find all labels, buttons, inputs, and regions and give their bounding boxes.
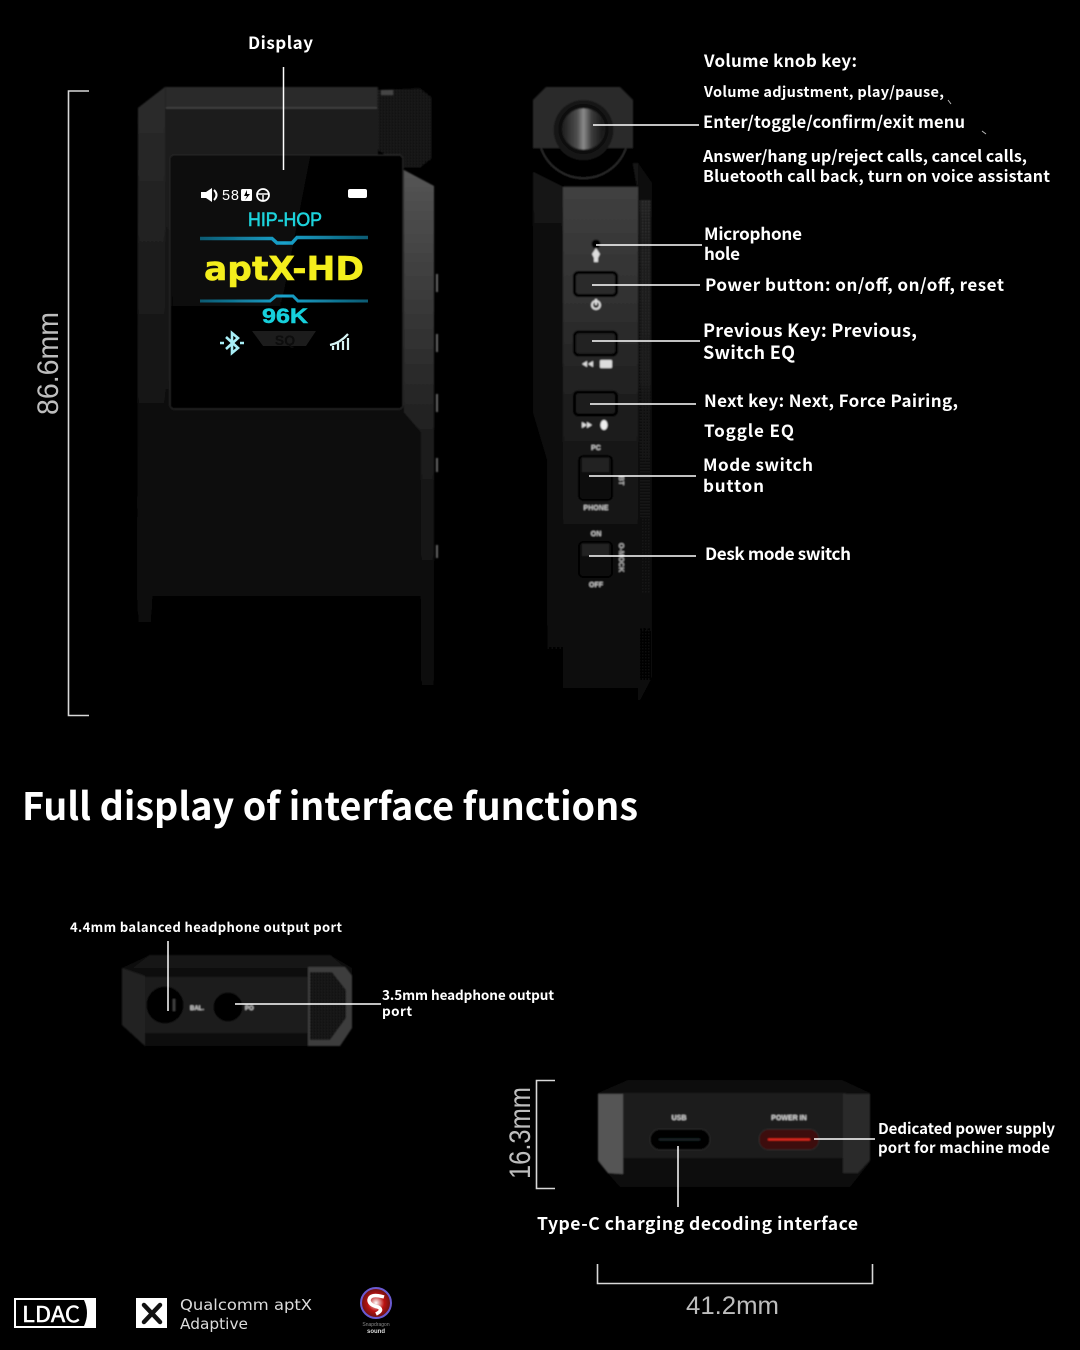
- screen: sample rate: 96K: [262, 305, 308, 328]
- screen: EQ label: HIP-HOP: [248, 210, 322, 231]
- leader lines: top edge ports: [168, 941, 381, 1011]
- side key marks: [436, 274, 438, 558]
- left end: [598, 1094, 623, 1174]
- logo: Snapdragon sound: [361, 1288, 391, 1335]
- screen: lower wave line: [200, 296, 368, 301]
- label: next key: Toggle EQ: [704, 417, 794, 442]
- power in port: [759, 1115, 819, 1150]
- mode switch: BT: [617, 476, 624, 486]
- label: 3.5mm port: [382, 984, 554, 1020]
- label: volume knob key: Bluetooth call back, turn on voice assistant: [703, 163, 1050, 187]
- next button: [574, 392, 616, 430]
- knob rings: [541, 148, 626, 178]
- title: Full display of interface functions: [22, 776, 638, 831]
- label: volume knob key: Volume adjustment, play/pause,: [703, 81, 944, 102]
- lower body panel: [152, 410, 421, 712]
- balanced jack: [146, 986, 204, 1024]
- label: dedicated power port: port for machine mode: [878, 1137, 1050, 1158]
- screen: SQ badge: SQ: [275, 332, 295, 348]
- label: mode switch: Mode switch: [703, 451, 813, 476]
- screen status row: 58: [222, 188, 239, 204]
- desk mode switch: O-MOCK: [617, 543, 624, 572]
- knob end: [308, 967, 352, 1046]
- label: volume knob key: Answer/hang up/reject calls, cancel calls,: [702, 143, 1027, 167]
- label: microphone hole: Microphone: [704, 220, 802, 245]
- icon: bluetooth: [220, 333, 244, 353]
- 3.5mm jack: [213, 992, 254, 1022]
- width dimension bracket: 41.2mm: [598, 1264, 872, 1320]
- height dimension bracket: 86.6mm: 86.6mm: [32, 312, 65, 415]
- right end: [843, 1094, 870, 1173]
- balanced jack: BAL.: [190, 1006, 204, 1012]
- label: dedicated power port: Dedicated power supply: [878, 1118, 1055, 1139]
- side panel: [563, 187, 638, 688]
- screen: codec: aptX-HD: [204, 249, 364, 288]
- label: mode switch: button: [703, 472, 764, 497]
- device: bottom edge view: [598, 1080, 870, 1187]
- screen status row: [201, 188, 367, 204]
- label: volume knob key: Enter/toggle/confirm/exit menu: [703, 109, 965, 133]
- label: microphone hole: hole: [704, 240, 740, 265]
- device: side view: [533, 87, 652, 713]
- desk mode switch: OFF: [589, 582, 604, 589]
- label: next key: Next key: Next, Force Pairing,: [704, 387, 958, 412]
- logo: LDAC: LDAC: [22, 1297, 80, 1329]
- mode switch: PC: [591, 445, 601, 452]
- side body: [533, 87, 652, 713]
- thickness dimension bracket: 16.3mm: 16.3mm: [504, 1087, 537, 1179]
- logo: Qualcomm aptX Adaptive: Qualcomm aptX: [180, 1296, 312, 1314]
- label: Display: Display: [248, 29, 313, 54]
- label: mode switch: [703, 451, 813, 497]
- label: next key: [704, 387, 958, 442]
- knob head: [533, 87, 633, 148]
- desk mode switch: [579, 531, 624, 589]
- screen: [170, 155, 403, 409]
- desk mode switch: ON: [591, 531, 601, 538]
- label: microphone hole: [704, 220, 802, 265]
- 3.5mm jack: PO: [245, 1006, 254, 1012]
- grip strip: [638, 163, 652, 700]
- label: previous key: [703, 317, 917, 365]
- screen content: [200, 188, 368, 353]
- label: volume knob key: Volume knob key:: [703, 47, 857, 72]
- logo: Qualcomm aptX Adaptive: [136, 1296, 312, 1333]
- leader lines: display and side controls: [284, 67, 702, 556]
- mode switch: [579, 445, 624, 512]
- label: previous key: Previous Key: Previous,: [703, 317, 917, 343]
- logo: Snapdragon sound: sound: [367, 1329, 385, 1335]
- icon: signal: [330, 334, 348, 350]
- label: dedicated power port: [878, 1118, 1055, 1158]
- microphone hole: [592, 240, 600, 262]
- screen: top wave line: [200, 238, 368, 243]
- USB port: USB: [672, 1115, 686, 1122]
- knob: [378, 88, 432, 168]
- mode switch: PHONE: [584, 505, 609, 512]
- leader lines: bottom edge ports: [678, 1139, 875, 1207]
- thickness dimension bracket: 16.3mm: [504, 1080, 555, 1188]
- label: desk mode switch: Desk mode switch: [705, 540, 851, 565]
- width dimension bracket: 41.2mm: 41.2mm: [686, 1292, 779, 1320]
- screen: SQ badge: [252, 331, 316, 348]
- label: previous key: Switch EQ: [703, 339, 795, 365]
- front body: [137, 87, 434, 713]
- label: volume knob key: [702, 47, 1050, 187]
- label: power button: Power button: on/off, on/off, reset: [705, 271, 1004, 296]
- logo: Snapdragon sound: Snapdragon: [362, 1322, 390, 1328]
- power in port: POWER IN: [771, 1115, 807, 1122]
- logo: Qualcomm aptX Adaptive: Adaptive: [180, 1315, 248, 1333]
- height dimension bracket: 86.6mm: [32, 91, 89, 716]
- label: 3.5mm port: port: [382, 1000, 412, 1020]
- USB port: [650, 1115, 710, 1150]
- device: front view: [137, 87, 437, 713]
- label: 4.4mm port: 4.4mm balanced headphone output port: [70, 917, 343, 936]
- label: Type-C interface: Type-C charging decoding interface: [537, 1211, 858, 1236]
- previous button: [574, 332, 616, 368]
- power button: [574, 272, 616, 309]
- device: top edge view: [122, 955, 352, 1046]
- logo: LDAC: [14, 1297, 96, 1329]
- label: 3.5mm port: 3.5mm headphone output: [382, 984, 554, 1004]
